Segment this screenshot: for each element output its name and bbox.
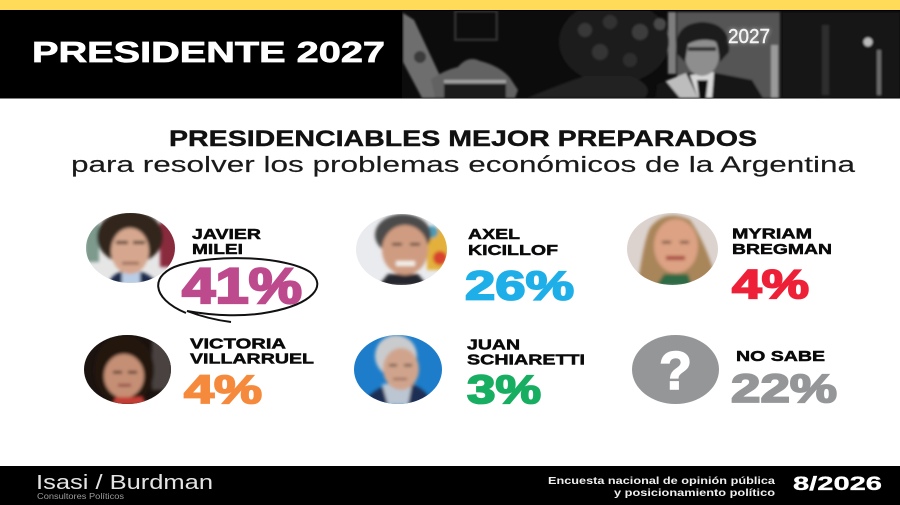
footer survey description: Encuesta nacional de opinión pública xyxy=(548,475,775,487)
icon: question mark circle xyxy=(632,335,719,404)
face xyxy=(685,34,719,76)
percentage: 22% xyxy=(731,367,837,411)
hair xyxy=(676,22,729,62)
suit xyxy=(655,73,763,98)
name: VICTORIA xyxy=(190,336,286,352)
candidate: Victoria Villarruel 4% xyxy=(84,335,314,404)
portrait: Kicillof xyxy=(355,213,449,286)
top yellow bar xyxy=(0,0,900,10)
icon: question mark circle: ? xyxy=(659,341,692,401)
header band xyxy=(0,10,900,98)
name: JAVIER xyxy=(192,226,261,243)
footer logo: Isasi / Burdman: Consultores Políticos xyxy=(37,492,124,501)
candidate: Axel Kicillof 26% xyxy=(355,213,574,308)
footer survey description xyxy=(548,475,775,499)
glow behind 2027 sign: 2027 xyxy=(728,26,770,48)
header title: PRESIDENTE 2027 xyxy=(32,37,385,69)
name: MYRIAM xyxy=(732,226,812,242)
footer logo: Isasi / Burdman: Isasi / Burdman xyxy=(36,472,213,494)
footer band xyxy=(0,466,900,505)
candidate: Myriam Bregman 4% xyxy=(626,212,832,307)
portrait: Schiaretti xyxy=(353,334,443,405)
name: AXEL xyxy=(468,226,520,243)
flag xyxy=(403,13,442,98)
portrait: Villarruel xyxy=(83,334,173,405)
percentage: 26% xyxy=(465,262,574,308)
percentage: 4% xyxy=(184,368,262,412)
name: JUAN xyxy=(467,336,520,354)
candidate: Myriam Bregman 4%: BREGMAN xyxy=(732,241,832,258)
portrait: Milei xyxy=(85,210,178,284)
sash xyxy=(666,73,698,98)
right side wall xyxy=(782,12,900,98)
header photo: Milei in presidential office, 2027 sign xyxy=(402,11,900,98)
candidate: Javier Milei 41% xyxy=(85,210,317,322)
no sabe 22% xyxy=(632,335,837,411)
main heading: PRESIDENCIABLES MEJOR PREPARADOS xyxy=(169,126,757,151)
chair xyxy=(431,59,518,98)
candidate: Juan Schiaretti 3%: SCHIARETTI xyxy=(467,352,585,368)
label: NO SABE xyxy=(736,348,825,365)
candidate: Axel Kicillof 26%: KICILLOF xyxy=(468,242,558,259)
back panel behind Milei xyxy=(677,12,780,98)
hand-drawn ellipse highlight xyxy=(158,258,317,322)
percentage: 4% xyxy=(732,261,809,307)
subheading: para resolver los problemas económicos de la Argentina xyxy=(71,152,856,177)
shirt and tie xyxy=(690,72,714,98)
portrait: Bregman xyxy=(626,212,719,286)
footer date: 8/2026 xyxy=(793,474,882,495)
2027 sign: 2027 xyxy=(728,26,770,48)
picture frame xyxy=(455,11,497,40)
candidate: Javier Milei 41%: MILEI xyxy=(192,241,243,258)
footer survey description: y posicionamiento político xyxy=(614,487,775,499)
footer logo: Isasi / Burdman xyxy=(36,472,213,501)
percentage: 41% xyxy=(182,258,302,314)
percentage: 3% xyxy=(467,368,541,412)
back of head xyxy=(559,11,670,80)
candidate: Victoria Villarruel 4%: VILLARRUEL xyxy=(190,350,314,368)
candidate: Juan Schiaretti 3% xyxy=(354,335,584,404)
